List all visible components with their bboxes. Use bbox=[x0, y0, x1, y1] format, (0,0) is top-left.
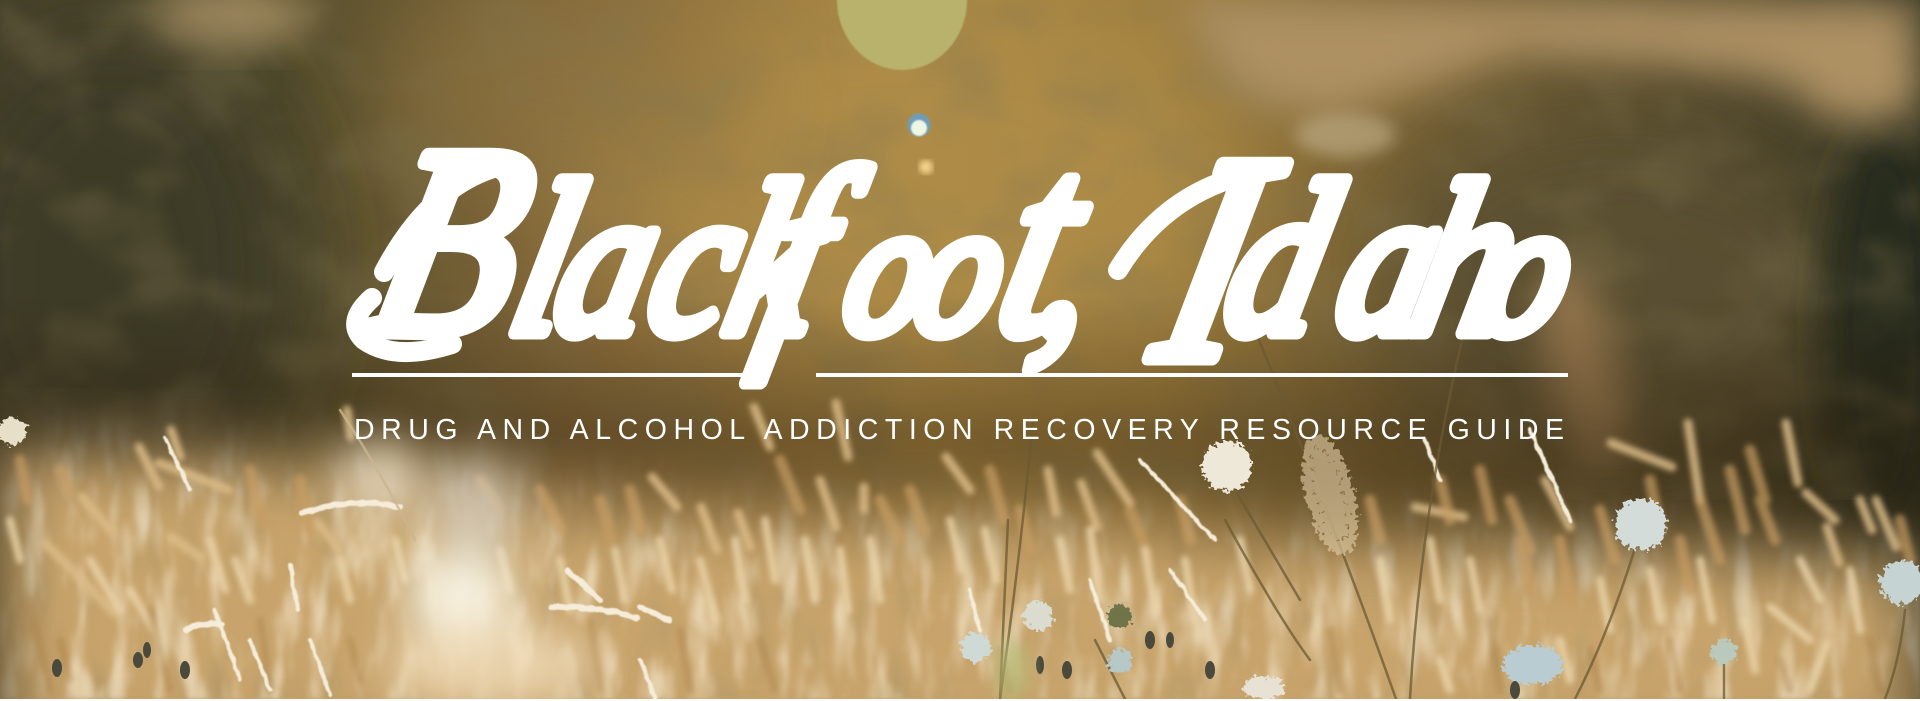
buds: small dark seed heads bbox=[52, 631, 1520, 699]
title swash flourishes bbox=[356, 166, 1268, 352]
hazy white glow in the foreground bbox=[338, 444, 595, 701]
flower: large seed head at centre right bbox=[1292, 429, 1368, 561]
soft green patch bbox=[994, 640, 1030, 700]
soft grass blades bbox=[10, 403, 1910, 690]
title underline: left bbox=[352, 373, 744, 377]
title: Blackfoot, Idaho: k bbox=[709, 139, 850, 380]
lens flare: green disc bbox=[837, 0, 967, 70]
stems and flowers bbox=[340, 330, 1905, 699]
title: Blackfoot, Idaho: c bbox=[631, 144, 765, 379]
meadow: grass field bbox=[0, 396, 1920, 699]
title: Blackfoot, Idaho: t bbox=[977, 92, 1114, 391]
subtitle: DRUG AND ALCOHOL ADDICTION RECOVERY RESOURCE GUIDE bbox=[354, 414, 1564, 446]
title: Blackfoot, Idaho: a bbox=[1319, 144, 1464, 379]
title: Blackfoot, Idaho: o bbox=[828, 162, 957, 373]
lens flare: orange spot bbox=[919, 160, 933, 174]
title: Blackfoot, Idaho: f bbox=[743, 123, 882, 383]
title: Blackfoot, Idaho: B bbox=[348, 92, 558, 391]
title: Blackfoot, Idaho: a bbox=[537, 144, 682, 379]
title: Blackfoot, Idaho: I bbox=[1130, 95, 1304, 423]
title: Blackfoot, Idaho bbox=[341, 92, 1611, 423]
title: Blackfoot, Idaho: , bbox=[1018, 118, 1131, 384]
title: Blackfoot, Idaho: o bbox=[1465, 162, 1595, 373]
thin stems bbox=[1000, 330, 1905, 699]
title underline: right bbox=[816, 373, 1568, 377]
lens flare: blue spot bbox=[908, 114, 930, 136]
sharp pale grass heads bbox=[165, 430, 1570, 699]
title: Blackfoot, Idaho: h bbox=[1394, 139, 1542, 380]
white base strip bbox=[0, 699, 1920, 701]
flowers: queen anne's lace bbox=[0, 417, 1920, 700]
title: Blackfoot, Idaho: l bbox=[494, 139, 601, 380]
title: Blackfoot, Idaho: o bbox=[898, 162, 1028, 373]
title: Blackfoot, Idaho: d bbox=[1207, 139, 1356, 380]
